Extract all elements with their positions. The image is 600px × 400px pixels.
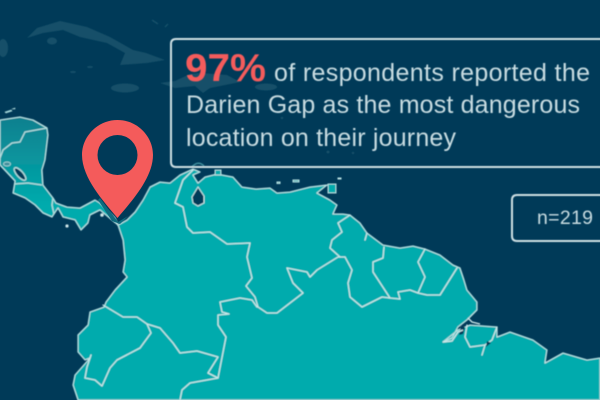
land mass	[73, 169, 600, 400]
callout text: Darien Gap as the most dangerous	[186, 91, 580, 119]
icon: location pin	[82, 120, 153, 218]
callout: 97% statistic	[171, 39, 600, 167]
pin shadow over gulf	[98, 198, 128, 224]
map: South America land and borders	[73, 163, 600, 400]
callout text: location on their journey	[186, 124, 456, 152]
small coastal islands	[215, 170, 341, 193]
map: Caribbean islands	[0, 20, 354, 154]
sample size label: n=219	[537, 207, 593, 229]
callout figure: 97%	[185, 47, 266, 90]
map: Central America	[0, 108, 118, 230]
callout text: of respondents reported the	[274, 59, 590, 87]
callout border	[171, 39, 600, 167]
sample size label	[512, 195, 600, 241]
lake and Amazon delta channels	[192, 187, 204, 206]
callout text	[186, 59, 590, 152]
country borders	[85, 170, 497, 400]
